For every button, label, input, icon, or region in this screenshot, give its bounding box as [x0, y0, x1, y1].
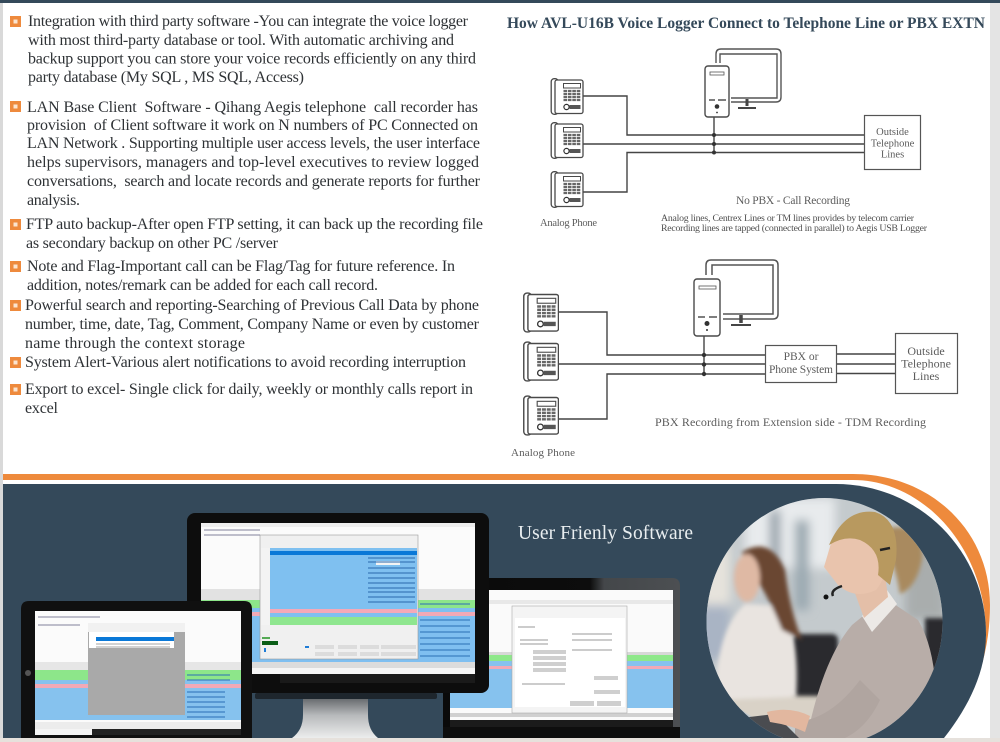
text: export: Export to excel- Single click for daily, weekly or monthly calls report in: [25, 381, 473, 398]
text: LAN client: conversations, search and locate records and generate reports for further: [27, 173, 481, 190]
bullet: system alert: [10, 357, 21, 368]
box: PBX or phone system: Phone System: [769, 364, 833, 376]
rear chair: [792, 634, 838, 696]
caption: no PBX: No PBX - Call Recording: [736, 195, 850, 207]
text: search: name through the context storage: [25, 335, 245, 352]
wiring: [583, 96, 864, 192]
panel: user friendly software: [3, 484, 986, 742]
text: search: Powerful search and reporting-Searching of Previous Call Data by phone: [25, 297, 479, 314]
arm: [795, 719, 811, 738]
text: LAN client: helps supervisors, managers and top-level executives to review logged: [27, 154, 479, 171]
keyboard: [749, 714, 799, 738]
office background: [700, 498, 945, 660]
desk: [728, 693, 817, 720]
label: analog phone: Analog Phone: [511, 447, 575, 459]
text: note and flag: [27, 258, 455, 294]
text: FTP: [26, 216, 483, 252]
icon: phone 3: [524, 396, 558, 435]
right page edge: [990, 3, 1000, 742]
icon: phone 3: [551, 172, 583, 207]
tablet: [21, 601, 252, 738]
diagram: PBX recording: [511, 260, 958, 459]
box: outside telephone lines: Lines: [881, 150, 904, 160]
neck: [855, 579, 888, 618]
monitor stand: [292, 693, 378, 738]
icon: phone 2: [524, 342, 558, 381]
text: search: number, time, date, Tag, Comment, Company Name or even by customer: [25, 316, 480, 333]
right chair: [922, 614, 942, 688]
left page edge: [0, 3, 3, 742]
text: note and flag: Note and Flag-Important call can be Flag/Tag for future reference. In: [27, 258, 455, 275]
monitor: [187, 513, 489, 738]
text: integration: [28, 13, 476, 86]
text: system alert: System Alert-Various alert notifications to avoid recording interruption: [25, 354, 466, 371]
icon: computer and monitor: [694, 260, 778, 336]
navy background: [3, 484, 986, 738]
icon: phone 2: [551, 123, 583, 158]
heading: user friendly software: User Frienly Software: [518, 523, 693, 544]
feature list: [10, 13, 483, 417]
main agent: [741, 512, 936, 742]
box: outside telephone lines: Outside: [876, 127, 909, 138]
text: search: [25, 297, 480, 352]
ponytail: [892, 524, 925, 596]
text: integration: backup support you can store your voice records efficiently on any third: [28, 50, 476, 68]
laptop: [443, 578, 680, 738]
box: outside telephone lines: Telephone: [901, 356, 951, 370]
text: LAN client: LAN Network . Supporting multiple user access levels, the user interface: [27, 135, 480, 152]
text: export: excel: [25, 400, 59, 417]
top dark rule: [0, 0, 1000, 3]
hair: [829, 512, 897, 585]
search dialog: [88, 623, 185, 715]
box: outside telephone lines: [864, 116, 920, 170]
box: outside telephone lines: Lines: [913, 369, 940, 383]
text: integration: party database (My SQL , MS SQL, Access): [28, 69, 304, 86]
box: PBX or phone system: PBX or: [784, 351, 819, 363]
box: outside telephone lines: [896, 334, 958, 394]
bullet: FTP: [10, 219, 21, 230]
bullet: note and flag: [10, 261, 21, 272]
text: FTP: FTP auto backup-After open FTP setting, it can back up the recording file: [26, 216, 483, 233]
text: integration: with most third-party database or tool. With automatic archiving and: [28, 32, 454, 49]
icon: computer and monitor: [705, 49, 781, 117]
diagram: no PBX call recording: [540, 49, 928, 234]
hand: [767, 710, 810, 732]
text: export: [25, 381, 473, 417]
text: LAN client: [27, 99, 481, 209]
text: LAN client: analysis.: [27, 192, 80, 209]
box: outside telephone lines: Outside: [907, 344, 945, 358]
bottom page edge: [0, 738, 1000, 742]
shirt: [811, 606, 934, 738]
text: integration: Integration with third party software -You can integrate the voice logger: [28, 13, 469, 30]
bullet: integration: [10, 16, 21, 27]
bullet: search: [10, 300, 21, 311]
icon: phone 1: [551, 79, 583, 114]
face: [824, 538, 880, 594]
diagram title: How AVL-U16B Voice Logger Connect to Telephone Line or PBX EXTN: [507, 15, 985, 32]
junction dots: [712, 133, 716, 154]
box: PBX or phone system: [766, 346, 836, 382]
wiring: [558, 312, 895, 419]
caption: PBX recording: PBX Recording from Extension side - TDM Recording: [655, 415, 926, 429]
junction dots: [702, 353, 706, 376]
box: outside telephone lines: Telephone: [871, 138, 915, 150]
text: FTP: as secondary backup on other PC /server: [26, 235, 279, 252]
text: note and flag: addition, notes/remark can be added for each call record.: [27, 277, 378, 294]
label: analog phone: Analog Phone: [540, 218, 597, 229]
colleague in background: [715, 546, 802, 700]
bullet: LAN client: [10, 101, 21, 112]
headset: [832, 548, 890, 596]
settings dialog: [512, 606, 627, 713]
note: line types: [661, 213, 928, 234]
orange swoosh band: [3, 474, 990, 703]
note: line types: Analog lines, Centrex Lines or TM lines provides by telecom carrier: [661, 213, 915, 224]
icon: phone 1: [524, 293, 558, 332]
note: line types: Recording lines are tapped (connected in parallel) to Aegis USB Logger: [661, 223, 928, 234]
photo: call centre agents: [700, 495, 950, 742]
text: LAN client: provision of Client software it work on N numbers of PC Connected on: [27, 117, 478, 134]
bullet: export: [10, 384, 21, 395]
recording player dialog: [260, 535, 418, 659]
text: LAN client: LAN Base Client Software - Qihang Aegis telephone call recorder has: [27, 99, 478, 116]
